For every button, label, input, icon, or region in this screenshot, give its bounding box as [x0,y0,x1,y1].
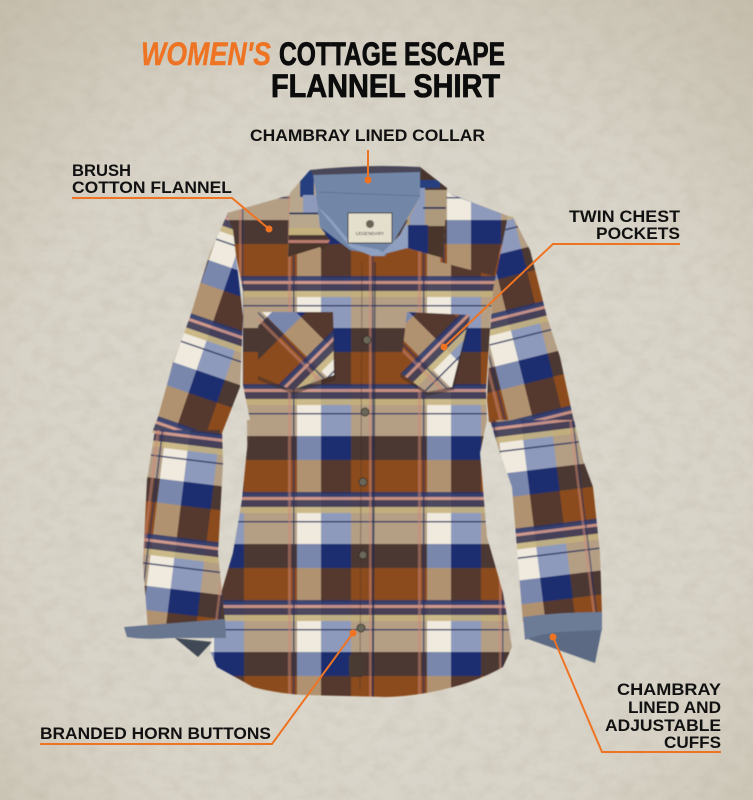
right cuff [523,612,602,663]
leader line: collar [364,150,372,184]
collar lining [313,170,420,256]
label: brush cotton flannel: BRUSH [72,161,131,180]
title [141,36,505,104]
right sleeve [487,216,602,622]
yoke right [438,190,508,276]
title: WOMEN'S [141,36,272,72]
label: brush cotton flannel: COTTON FLANNEL [72,178,232,197]
button placket [360,262,375,696]
shirt illustration [124,165,602,697]
right collar leaf [382,166,448,258]
label: chambray lined and adjustable cuffs: ADJUSTABLE [605,716,721,735]
label: branded horn buttons: BRANDED HORN BUTTONS [40,724,271,743]
leader line: flannel [72,198,272,232]
leader line: buttons [40,630,356,744]
label: chambray lined collar: CHAMBRAY LINED COLLAR [250,126,485,145]
title: FLANNEL SHIRT [271,68,500,104]
label: chambray lined and adjustable cuffs: LINED AND [628,698,721,717]
label: chambray lined and adjustable cuffs: CUFFS [664,733,721,752]
label: twin chest pockets [569,207,681,243]
left collar leaf [288,170,331,258]
title: COTTAGE ESCAPE [279,36,505,72]
buttons [357,336,371,632]
label: twin chest pockets: TWIN CHEST [569,207,681,226]
brand label [348,213,392,243]
right pocket flap [400,312,470,396]
label: twin chest pockets: POCKETS [596,224,680,243]
leader line: pockets [440,244,680,350]
label: chambray lined and adjustable cuffs: CHAMBRAY [617,680,722,699]
label: chambray lined and adjustable cuffs [605,680,722,752]
left sleeve [143,215,243,630]
left cuff [124,619,226,657]
leader line: cuffs [550,634,721,752]
left pocket flap [258,312,336,394]
label: brush cotton flannel [72,161,232,197]
body left edge column [210,420,250,685]
brand label: LEGENDARY [356,231,384,236]
collar band top [310,166,422,175]
shirt body [210,190,512,697]
branded hem patch [349,655,363,677]
